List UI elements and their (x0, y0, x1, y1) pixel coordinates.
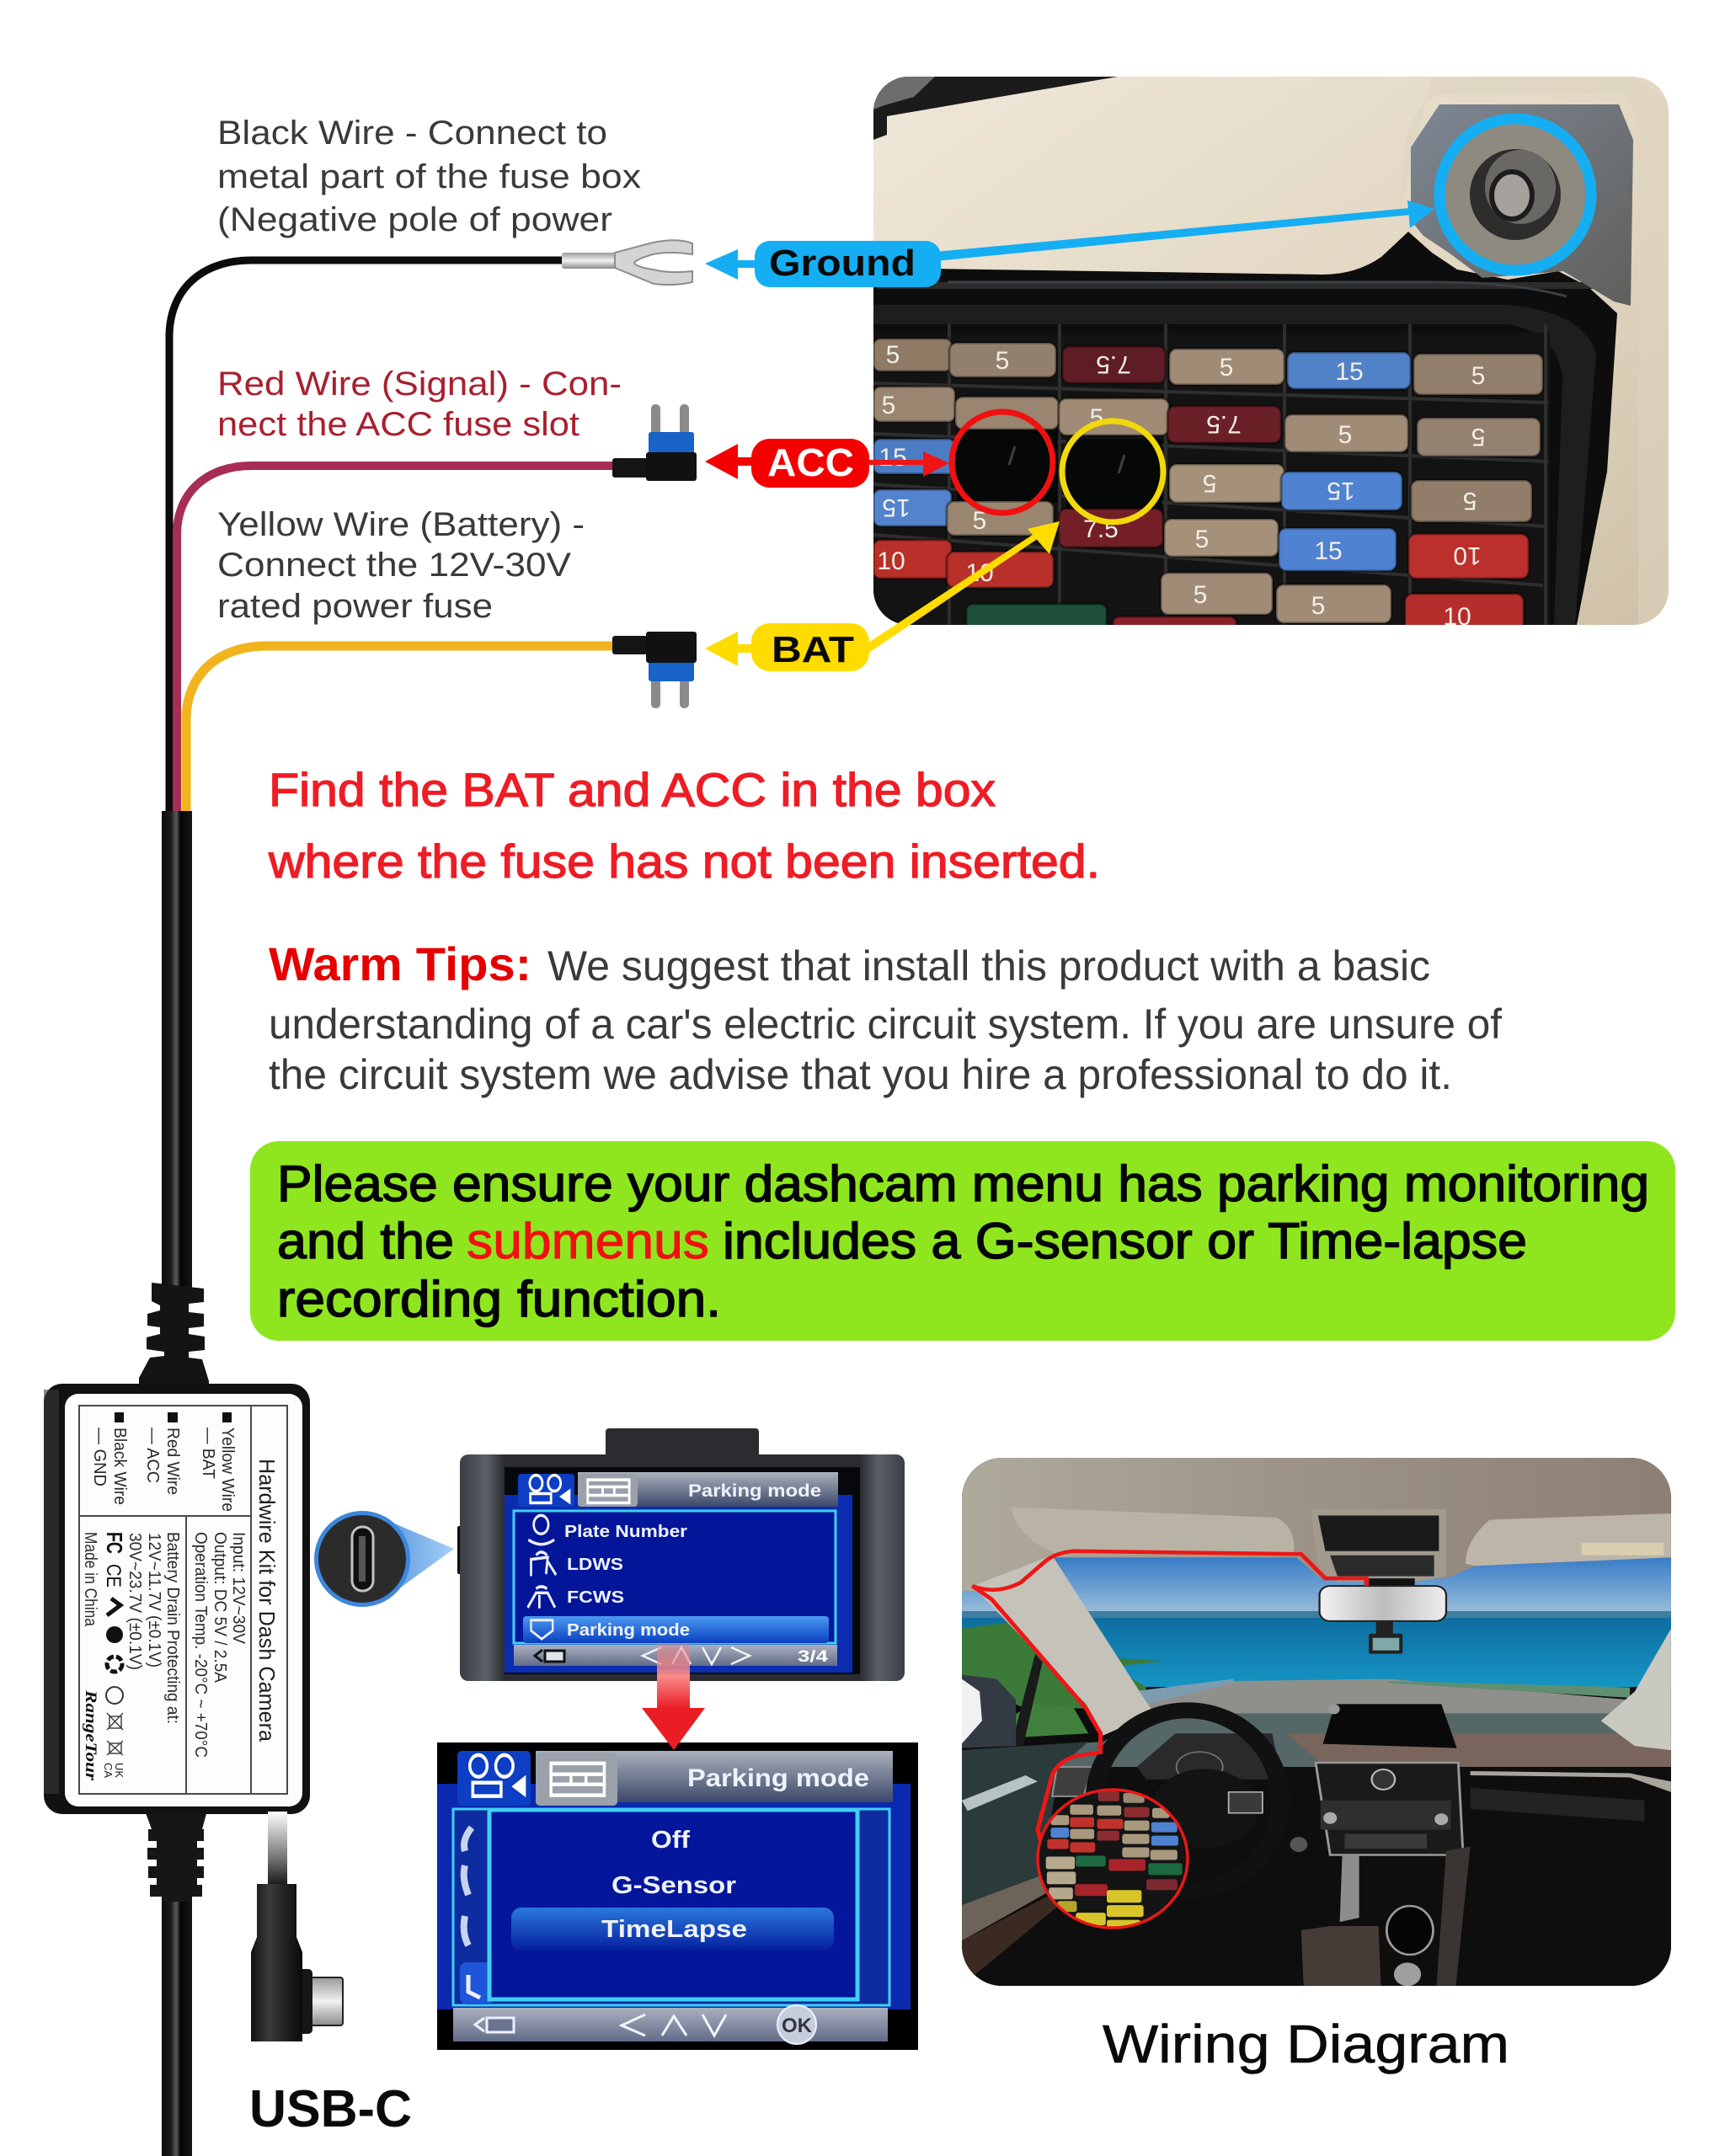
row 5 of fuses: 10 (1443, 603, 1471, 631)
row 5 of fuses: 5 (1194, 581, 1207, 609)
hardwire module (44, 1384, 310, 1814)
screen footer: 3/4 (798, 1648, 829, 1666)
row 2 of fuses: 5 (1090, 404, 1103, 432)
row 2 of fuses: 5 (1471, 423, 1485, 451)
warm tips text: understanding of a car's electric circuit system. If you are unsure of (269, 1001, 1502, 1048)
arrow: ACC to slot (863, 451, 949, 477)
coastal hills (962, 1622, 1166, 1708)
callout: parking monitoring note: and the (277, 1213, 454, 1269)
screen menu list: Parking mode (567, 1621, 690, 1640)
row 4 of fuses: 7.5 (1083, 515, 1119, 543)
red wire caption (217, 366, 622, 443)
road (1147, 1679, 1626, 1713)
car interior photo (962, 1458, 1671, 1986)
specifications: Operation Temp. -20°C ~ +70°C (191, 1532, 210, 1758)
specifications: Made in China (81, 1532, 99, 1627)
screen footer (514, 1645, 837, 1666)
row 4 of fuses (873, 489, 1529, 579)
screen menu list: FCWS (567, 1588, 624, 1607)
mini dash camera (1369, 1634, 1402, 1654)
wire legend: Yellow Wire (218, 1428, 237, 1512)
wire legend: — GND (90, 1428, 109, 1486)
row 5 of fuses: 10 (965, 559, 994, 587)
row 3 of fuses and empty slots: 5 (1203, 469, 1216, 497)
fuse inset circle (1038, 1790, 1188, 1929)
specifications: Input: 12V~30V (229, 1532, 248, 1645)
ceiling and visors (962, 1458, 1671, 1591)
warm tips text: the circuit system we advise that you hire a professional to do it. (269, 1051, 1452, 1098)
instrument cluster (1137, 1733, 1282, 1780)
warm tips text: Warm Tips: (269, 937, 531, 990)
USB-C right-angle plug (251, 1884, 343, 2041)
yellow wire (186, 646, 612, 817)
row 2 of fuses (873, 387, 1541, 456)
marker: ground circle (1439, 119, 1591, 270)
wire legend: Red Wire (163, 1428, 182, 1495)
large screen header (457, 1751, 893, 1806)
row 1 of fuses: 5 (1471, 362, 1485, 390)
callout: parking monitoring note (250, 1141, 1675, 1341)
popup options: G-Sensor (611, 1872, 736, 1899)
heading: find BAT and ACC: where the fuse has not been inserted. (268, 835, 1100, 888)
USB-C port callout (314, 1511, 454, 1607)
rear-view mirror (1320, 1586, 1446, 1621)
row 5 of fuses: 10 (877, 547, 905, 575)
certification marks: UK (113, 1763, 126, 1778)
screen header (518, 1472, 838, 1507)
callout: parking monitoring note: submenus (467, 1213, 709, 1269)
yellow wire caption: Connect the 12V-30V (217, 547, 571, 584)
row 2 of fuses: 5 (882, 392, 895, 419)
wire legend: Black Wire (110, 1428, 129, 1505)
marker: BAT slot circle (1062, 421, 1163, 522)
side mirror (962, 1675, 1016, 1748)
row 4 of fuses: 15 (1314, 537, 1343, 565)
certification marks: CA (102, 1763, 115, 1778)
red wire caption: Red Wire (Signal) - Con- (217, 366, 622, 403)
row 1 of fuses: 5 (996, 347, 1009, 375)
specifications: 30V~23.7V (±0.1V) (126, 1533, 144, 1670)
wire legend (90, 1412, 237, 1512)
wire legend: — BAT (199, 1428, 217, 1479)
red wire caption: nect the ACC fuse slot (217, 406, 579, 443)
row 3 of fuses and empty slots (873, 431, 1532, 522)
label: ACC (751, 439, 869, 488)
red cable route (972, 1551, 1366, 1859)
ring terminal (562, 240, 692, 285)
popup options (489, 1810, 857, 1999)
marker: ACC slot circle (952, 412, 1053, 513)
yellow wire caption (217, 506, 585, 625)
row 2 of fuses: 5 (1338, 421, 1352, 449)
fuse box photo (873, 77, 1669, 642)
large screen footer (453, 2005, 888, 2044)
large screen footer: OK (782, 2015, 813, 2037)
yellow wire caption: rated power fuse (217, 588, 493, 625)
screen menu list: Plate Number (564, 1523, 687, 1541)
yellow wire caption: Yellow Wire (Battery) - (217, 506, 585, 543)
popup options: TimeLapse (601, 1916, 747, 1943)
red wire (177, 466, 612, 817)
label: Ground: Ground (769, 243, 916, 284)
arrow: ACC to fuse tap (705, 444, 758, 479)
specifications: Battery Drain Protecting at: (163, 1532, 182, 1724)
lower black cable (162, 1902, 192, 2156)
caption: Wiring Diagram: Wiring Diagram (1103, 2014, 1509, 2074)
grey metal plate and ground screw (1411, 104, 1633, 306)
label table lines (79, 1406, 287, 1794)
A pillars (972, 1556, 1154, 1736)
callout: parking monitoring note: recording function. (277, 1271, 721, 1327)
label: BAT (751, 623, 869, 671)
brand: RangeTour (82, 1689, 99, 1781)
black wire (169, 260, 562, 817)
row 4 of fuses: 15 (882, 494, 911, 521)
main black cable (162, 811, 192, 1291)
row 4 of fuses: 10 (1453, 542, 1482, 569)
large screen header: Parking mode (687, 1764, 869, 1792)
row 5 of fuses: 5 (1311, 592, 1325, 620)
heading: find BAT and ACC: Find the BAT and ACC in the box (269, 763, 996, 816)
black wire caption (217, 115, 641, 238)
upper strain relief (139, 1283, 209, 1388)
warm tips text: We suggest that install this product with a basic (547, 942, 1430, 990)
second menu screen (437, 1742, 918, 2050)
row 1 of fuses: 5 (886, 341, 900, 369)
arrow: ground to screw (935, 200, 1434, 261)
USB-C cord (268, 1812, 287, 1887)
row 5 of fuses (873, 539, 1524, 625)
callout: parking monitoring note: Please ensure your dashcam menu has parking monitoring (277, 1155, 1649, 1212)
steering wheel (1086, 1702, 1284, 1792)
row 1 of fuses: 7.5 (1096, 350, 1131, 378)
row 1 of fuses: 5 (1220, 354, 1233, 382)
row 4 of fuses: 5 (973, 507, 986, 535)
lower strain relief (145, 1811, 207, 1905)
ACC fuse tap (612, 404, 697, 481)
specifications: 12V~11.7V (±0.1V) (145, 1533, 163, 1668)
specifications: Output: DC 5V / 2.5A (211, 1532, 229, 1684)
black wire caption: (Negative pole of power (217, 201, 612, 238)
row 3 of fuses and empty slots: 15 (879, 444, 907, 472)
center console (1316, 1763, 1463, 1854)
row 4 of fuses: 5 (1195, 526, 1209, 553)
screen header: Parking mode (688, 1481, 821, 1501)
certification marks (102, 1532, 127, 1778)
overhead console (1311, 1509, 1446, 1582)
screen menu list (514, 1511, 836, 1643)
popup options: Off (651, 1827, 690, 1854)
screen menu list: LDWS (567, 1556, 623, 1574)
row 3 of fuses and empty slots: 15 (1327, 477, 1355, 504)
row 2 of fuses: 7.5 (1206, 410, 1242, 438)
heading: find BAT and ACC (268, 763, 1100, 888)
label: BAT: BAT (772, 629, 854, 670)
dash top (962, 1713, 1671, 1986)
row 1 of fuses: 15 (1335, 358, 1364, 386)
arrow: menu to submenu (642, 1643, 705, 1750)
BAT fuse tap (612, 632, 697, 708)
callout: parking monitoring note: includes a G-sensor or Time-lapse (723, 1213, 1527, 1269)
certification marks: CE (102, 1564, 125, 1588)
arrow: BAT to slot (863, 521, 1060, 654)
wire legend: — ACC (143, 1428, 162, 1483)
black wire caption: Black Wire - Connect to (217, 115, 607, 152)
label: ACC: ACC (767, 440, 854, 484)
arrow: BAT to fuse tap (705, 632, 758, 666)
USB-C label: USB-C (249, 2080, 412, 2138)
left door (962, 1742, 1088, 1905)
row 1 of fuses (873, 339, 1543, 395)
warm tips text (269, 937, 1502, 1098)
arrow: ground to terminal (705, 249, 758, 280)
label: Ground (755, 241, 941, 287)
infotainment screen (1323, 1704, 1457, 1748)
background list frame (453, 1809, 889, 2005)
module title: Hardwire Kit for Dash Camera (254, 1459, 280, 1742)
certification marks: FC (102, 1532, 127, 1554)
row 3 of fuses and empty slots: 5 (1463, 487, 1477, 515)
specifications (81, 1532, 248, 1758)
air vent (1052, 1767, 1093, 1796)
dash camera (457, 1428, 905, 1681)
black wire caption: metal part of the fuse box (217, 158, 641, 195)
